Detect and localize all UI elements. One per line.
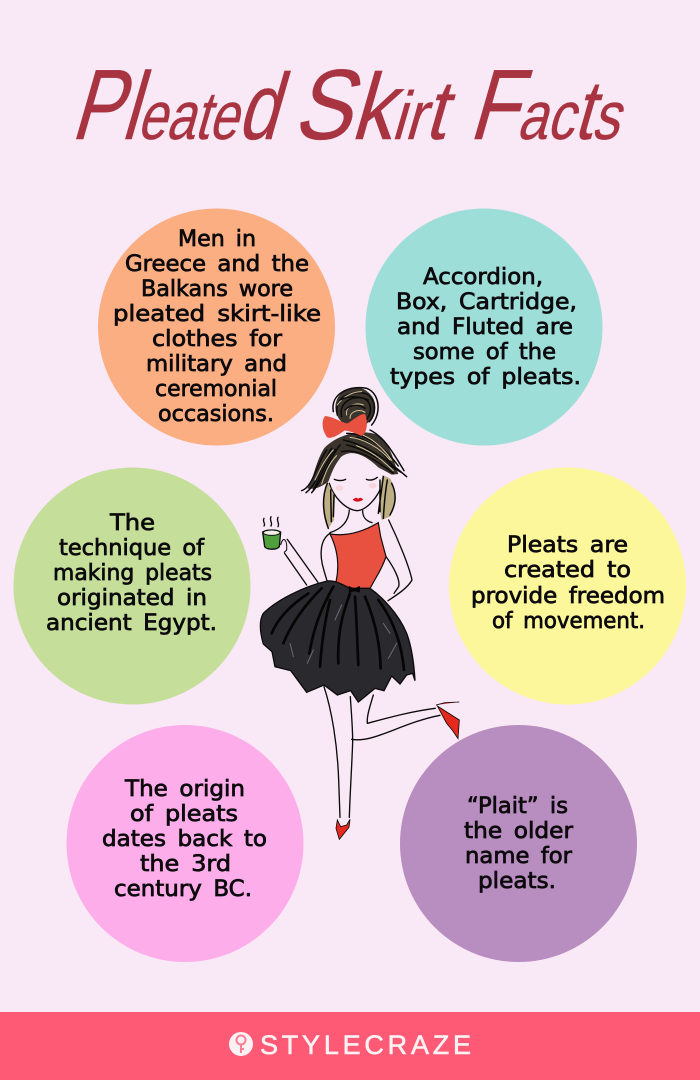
body skin and limbs: [285, 510, 440, 817]
face: [329, 477, 382, 511]
fact circle: origin of pleats: century BC.: [114, 877, 252, 902]
fact circle: ancient Egypt: originated in: [57, 586, 207, 611]
fact circle: origin of pleats: [66, 725, 304, 962]
title: Facts: [462, 49, 644, 161]
fact circle: plait: pleats.: [478, 869, 556, 894]
black skirt: [260, 581, 415, 702]
fact circle: Greece and the Balkans: Balkans wore: [141, 277, 293, 302]
green cup with steam: [263, 517, 287, 553]
fact circle: ancient Egypt: [14, 468, 250, 704]
fact circle: plait: “Plait” is: [467, 794, 568, 819]
red high heel raised: [436, 702, 459, 739]
fact circle: Greece and the Balkans: occasions.: [158, 402, 274, 427]
fact circle: Greece and the Balkans: Greece and the: [125, 252, 309, 277]
fact circle: Greece and the Balkans: pleated skirt-like: [113, 302, 321, 327]
fact circle: Greece and the Balkans: [98, 208, 335, 446]
fact circle: ancient Egypt: The: [109, 511, 155, 536]
brand name: STYLECRAZE: [260, 1030, 471, 1060]
fact circle: types of pleats: Box, Cartridge,: [396, 290, 577, 315]
fact circle: origin of pleats: dates back to: [102, 827, 267, 852]
fact circle: plait: the older: [464, 819, 574, 844]
fact circle: types of pleats: [366, 208, 602, 446]
title: Pleated: [64, 49, 302, 161]
fact circle: origin of pleats: The origin: [124, 777, 245, 802]
red dress top: [330, 523, 386, 589]
fact circle: ancient Egypt: making pleats: [53, 561, 212, 586]
fact circle: Greece and the Balkans: military and: [146, 352, 287, 377]
footer band: [0, 1012, 700, 1080]
fact circle: freedom of movement: created to: [504, 558, 631, 583]
fact circle: plait: name for: [465, 844, 573, 869]
fact circle: Greece and the Balkans: clothes for: [152, 327, 283, 352]
fact circle: freedom of movement: [449, 468, 686, 704]
red hair bow: [323, 414, 367, 438]
fact circle: Greece and the Balkans: ceremonial: [155, 377, 277, 402]
fact circle: freedom of movement: of movement.: [492, 609, 645, 634]
red high heel standing: [336, 819, 350, 839]
title: Skirt: [286, 49, 470, 161]
hair and bun: [302, 387, 407, 528]
brand logo icon: [229, 1032, 253, 1056]
fact circle: plait: [400, 725, 637, 962]
waist bow: [349, 587, 359, 592]
fact circle: ancient Egypt: technique of: [59, 536, 205, 561]
skirt pleats: [272, 587, 404, 670]
fact circle: types of pleats: types of pleats.: [390, 365, 581, 390]
fact circle: Greece and the Balkans: Men in: [178, 227, 256, 252]
fact circle: types of pleats: and Fluted are: [397, 315, 573, 340]
fact circle: origin of pleats: of pleats: [130, 802, 238, 827]
illustration: girl in pleated skirt: [260, 387, 459, 839]
fact circle: origin of pleats: the 3rd: [140, 852, 231, 877]
fact circle: ancient Egypt: ancient Egypt.: [46, 611, 217, 636]
fact circle: types of pleats: Accordion,: [423, 265, 543, 290]
fact circle: types of pleats: some of the: [413, 340, 556, 365]
fact circle: freedom of movement: provide freedom: [471, 584, 665, 609]
title: [64, 49, 644, 161]
fact circle: freedom of movement: Pleats are: [507, 533, 628, 558]
